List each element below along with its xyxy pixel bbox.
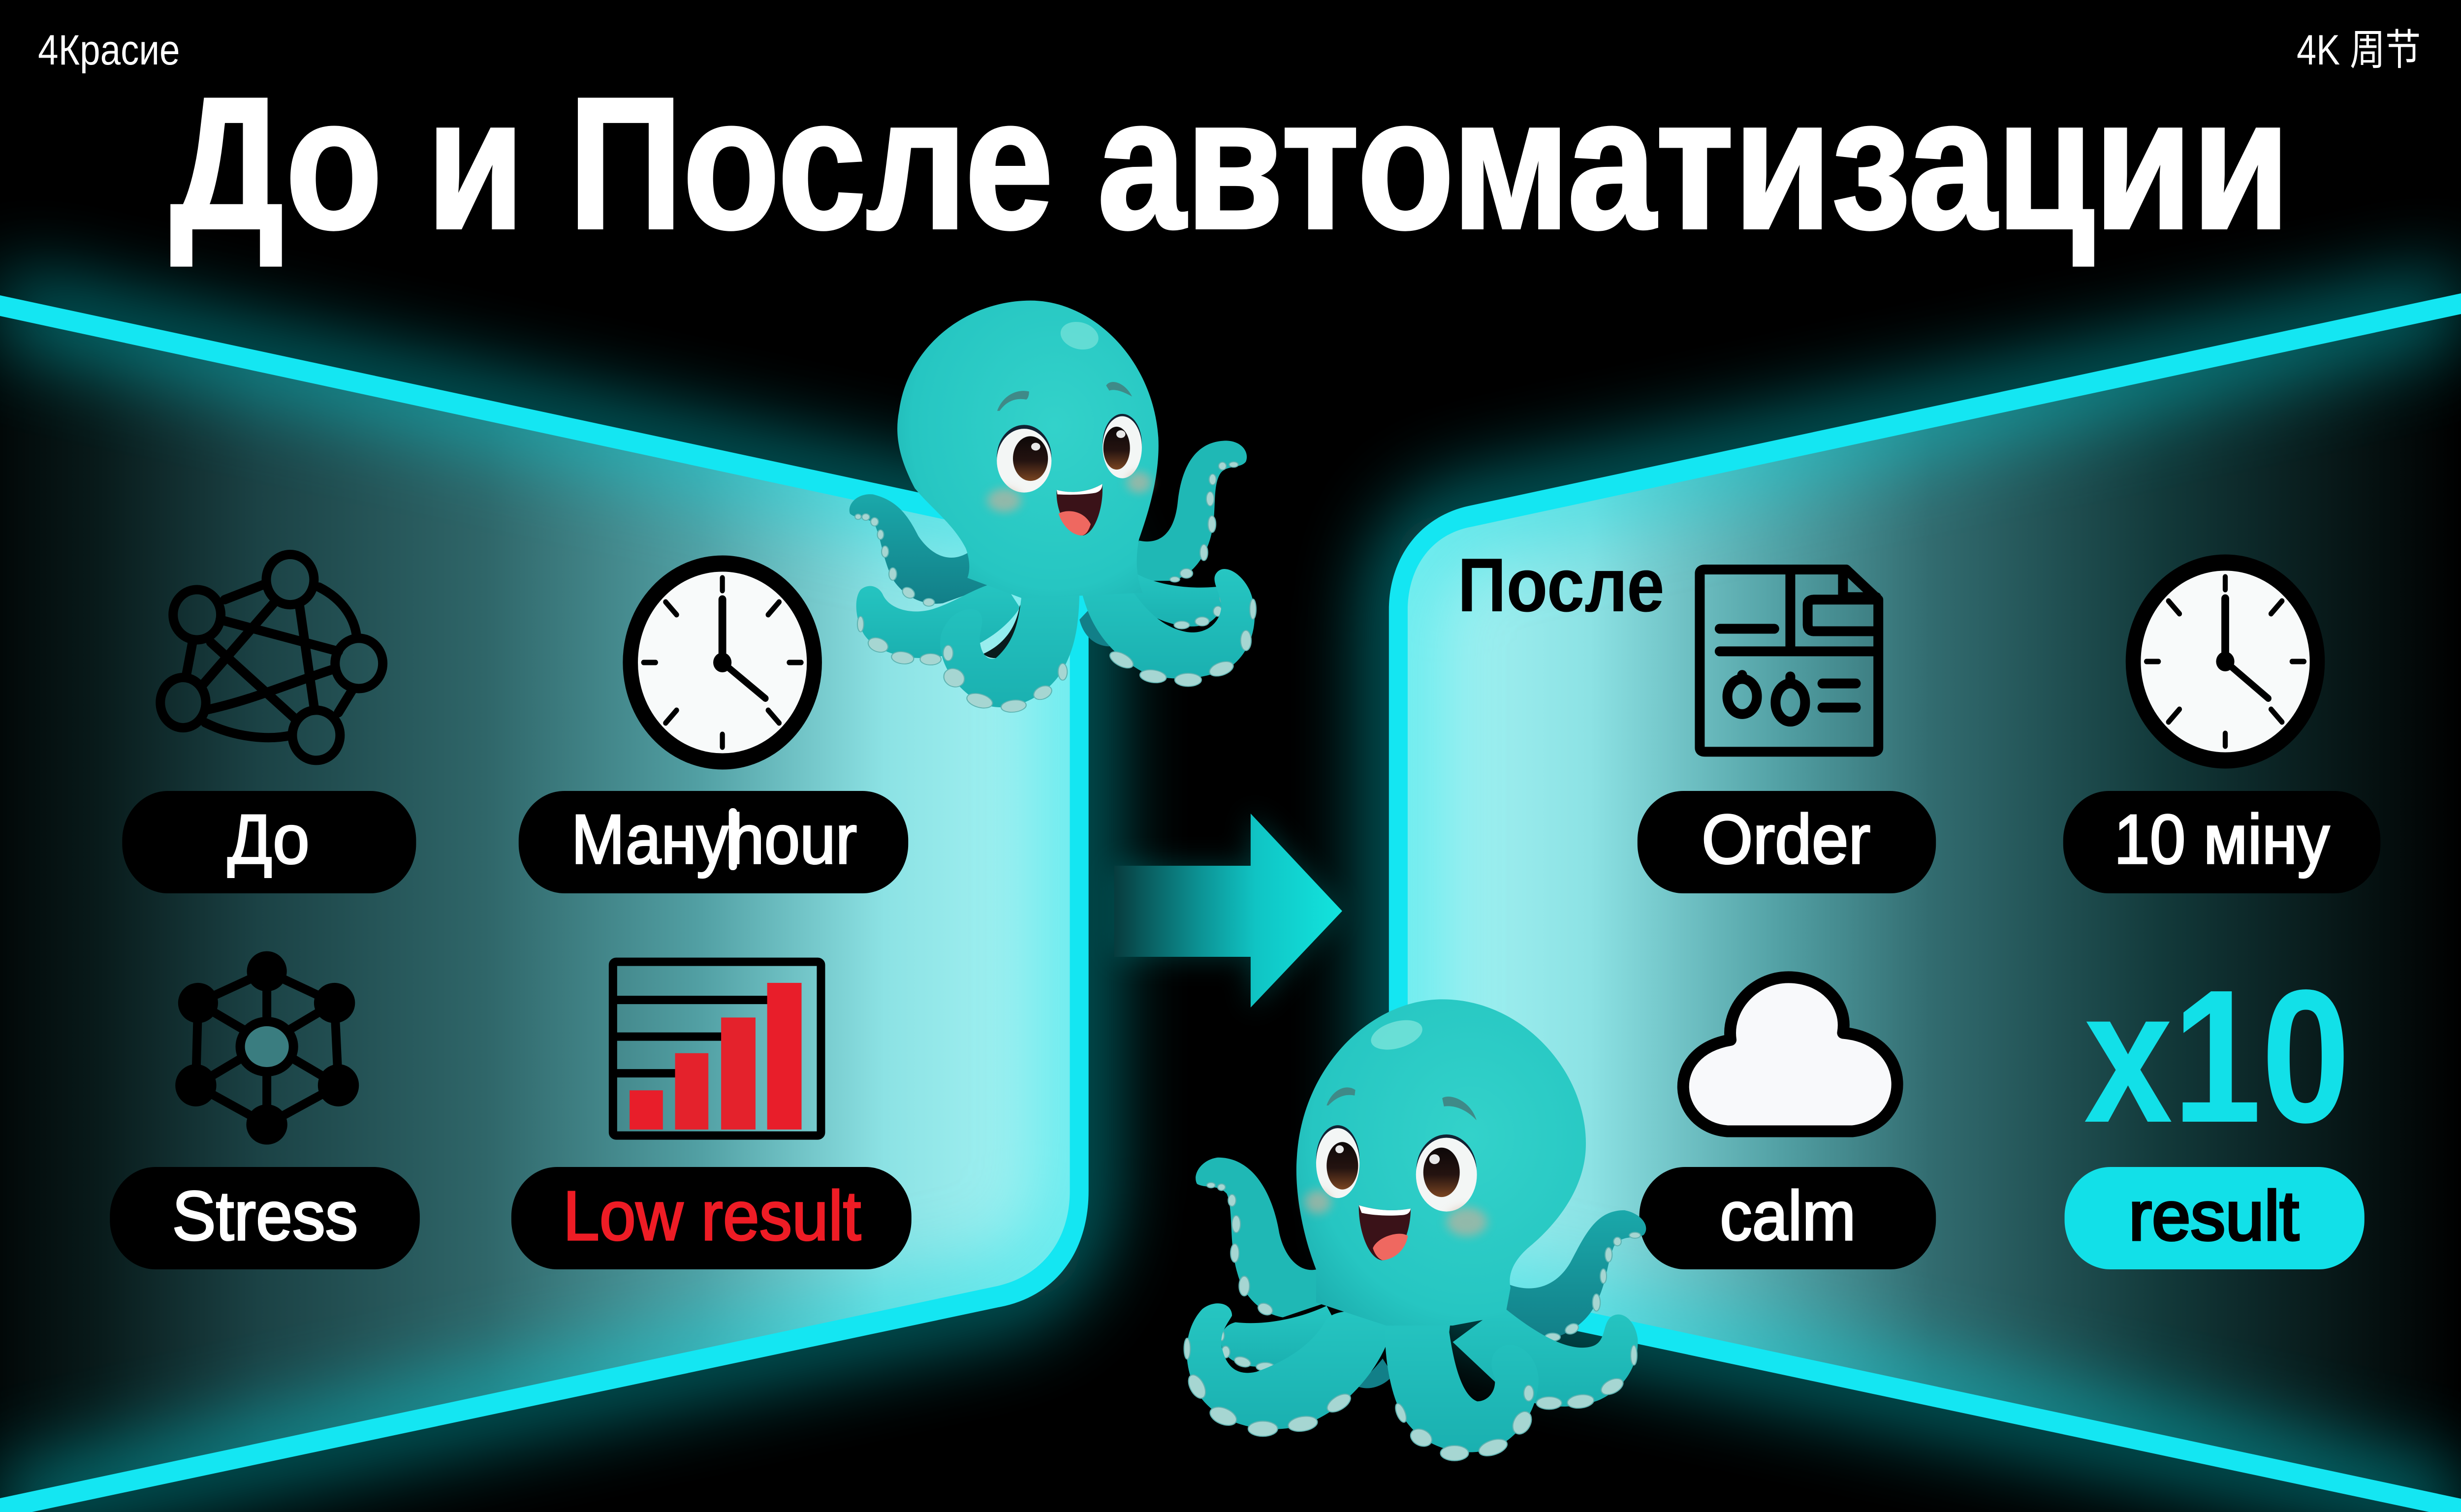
pill: До: До bbox=[227, 801, 310, 879]
panel border: before bbox=[0, 295, 1089, 1512]
pill: 10 міну bbox=[2063, 791, 2380, 893]
brand label right: 4K 周节 bbox=[2297, 26, 2421, 74]
tentacle: back right bbox=[1495, 1210, 1646, 1340]
head highlight bbox=[1367, 1014, 1426, 1055]
left eye bbox=[1316, 1125, 1359, 1198]
icon: tangled network bbox=[160, 555, 383, 760]
tentacle: left middle bbox=[1221, 1306, 1341, 1367]
suckers: large right bbox=[1106, 599, 1256, 687]
icon: clock many hours bbox=[631, 564, 815, 761]
suckers: curled bbox=[1393, 1385, 1535, 1461]
octopus: top mascot bbox=[850, 301, 1256, 714]
tentacle: right front bbox=[1453, 1306, 1638, 1407]
cheeks bbox=[1304, 1190, 1487, 1236]
head bbox=[897, 301, 1159, 598]
suckers: back tentacles bbox=[855, 462, 1238, 606]
suckers: large left bbox=[1184, 1338, 1354, 1436]
arrow: before to after bbox=[1114, 814, 1342, 1008]
cheeks bbox=[987, 472, 1151, 512]
pill: calm bbox=[1640, 1167, 1936, 1269]
tentacle: back left bbox=[850, 494, 988, 604]
heading: После: После bbox=[1457, 542, 1665, 628]
suckers: right front bbox=[1537, 1345, 1637, 1410]
head highlight bbox=[1055, 317, 1104, 355]
right eye bbox=[1103, 414, 1142, 478]
eyebrows bbox=[1326, 1087, 1477, 1120]
panel glow: after bbox=[1398, 304, 2461, 1509]
panel glow: before bbox=[0, 306, 1079, 1509]
pill: 10 міну: 10 міну bbox=[2114, 801, 2330, 879]
pill: Many hour bbox=[519, 791, 908, 893]
eyebrows bbox=[997, 382, 1132, 411]
suckers: front left bbox=[857, 616, 941, 665]
tentacle: curled front bbox=[1385, 1302, 1539, 1452]
head bbox=[1296, 999, 1586, 1325]
icon: order document bbox=[1700, 569, 1878, 752]
suckers: curled bbox=[940, 645, 1067, 714]
pill: Low result bbox=[511, 1167, 912, 1269]
tentacle: right middle bbox=[1114, 569, 1223, 627]
pill: До bbox=[122, 791, 416, 893]
panel border: after bbox=[1389, 293, 2461, 1512]
dark underside bbox=[1079, 605, 1122, 646]
panel: after bbox=[1389, 293, 2461, 1512]
title: До и После автоматизации bbox=[170, 59, 2290, 268]
icon: cloud calm bbox=[1683, 977, 1897, 1131]
pill: Stress: Stress bbox=[172, 1177, 358, 1255]
octopus: bottom mascot bbox=[1184, 999, 1646, 1461]
brand label left: 4Красие bbox=[38, 26, 180, 74]
pill: calm: calm bbox=[1720, 1177, 1856, 1255]
panel fill: after bbox=[1398, 304, 2461, 1509]
dark underside bbox=[1355, 1358, 1393, 1388]
icon: stress hub bbox=[175, 951, 359, 1145]
tentacle: front left bbox=[856, 581, 1020, 658]
panel: before bbox=[0, 295, 1089, 1512]
pill: Stress bbox=[110, 1167, 420, 1269]
left eye bbox=[997, 425, 1051, 493]
shadow gap under body bbox=[983, 605, 1021, 658]
mouth bbox=[1057, 484, 1103, 536]
pill: Many hour: Мануhour bbox=[571, 801, 857, 879]
suckers: back tentacles bbox=[1207, 1183, 1641, 1341]
icon: bar chart red bbox=[613, 962, 821, 1135]
right eye bbox=[1416, 1134, 1477, 1212]
pill: result: result bbox=[2129, 1177, 2299, 1255]
pill: Order: Order bbox=[1702, 801, 1870, 879]
tentacle: large left bbox=[1187, 1303, 1386, 1429]
tentacle: back right bbox=[1122, 441, 1247, 581]
suckers: left middle bbox=[1219, 1330, 1274, 1371]
pill: Order bbox=[1638, 791, 1936, 893]
suckers: right middle bbox=[1174, 593, 1225, 629]
tentacle: back left bbox=[1196, 1158, 1326, 1318]
big number x10: x10 bbox=[2084, 950, 2350, 1162]
pill: Low result: Low result bbox=[563, 1177, 861, 1255]
pill: result bbox=[2065, 1167, 2365, 1269]
mouth bbox=[1359, 1205, 1411, 1260]
tentacle: curled front bbox=[940, 578, 1079, 707]
panel fill: before bbox=[0, 306, 1079, 1509]
tentacle: large right bbox=[1079, 569, 1255, 679]
icon: clock 10 minutes bbox=[2133, 563, 2317, 760]
